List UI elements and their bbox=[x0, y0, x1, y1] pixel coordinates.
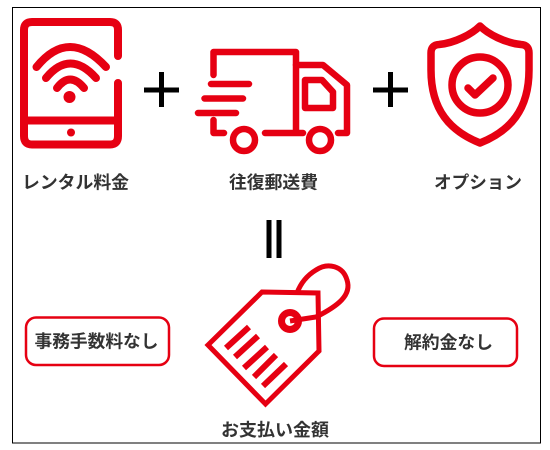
callout: no cancellation fee: 解約金なし bbox=[404, 332, 493, 352]
equals sign rotated bbox=[269, 220, 279, 258]
label: rental fee: レンタル料金 bbox=[22, 172, 129, 192]
label: options: オプション bbox=[434, 172, 522, 192]
icon: price tag bbox=[208, 266, 348, 404]
callout: no admin fee bbox=[26, 318, 169, 365]
icon: tablet with wifi bbox=[24, 22, 118, 144]
label: total payment: お支払い金額 bbox=[221, 420, 329, 440]
callout: no admin fee: 事務手数料なし bbox=[34, 332, 158, 352]
callout: no cancellation fee bbox=[374, 318, 517, 366]
label: return shipping fee: 往復郵送費 bbox=[229, 172, 318, 192]
plus sign 2 bbox=[373, 72, 408, 107]
icon: delivery truck bbox=[198, 52, 347, 151]
plus sign 1 bbox=[144, 72, 179, 107]
icon: shield with check bbox=[431, 26, 529, 143]
